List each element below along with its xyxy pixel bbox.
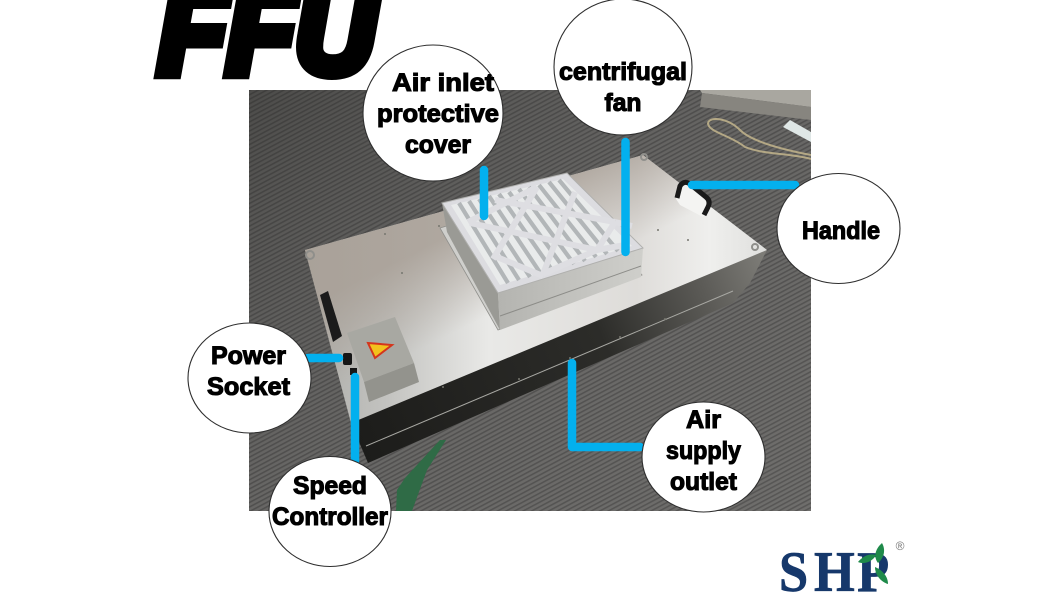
green plastic wrap <box>396 440 446 511</box>
callout: centrifugal fan <box>554 0 692 135</box>
callout: power socket: Socket <box>207 373 291 401</box>
filter lattice <box>468 187 632 276</box>
callout: speed controller: Speed <box>293 472 367 500</box>
filter frame <box>442 173 643 293</box>
panel rivets <box>384 225 689 388</box>
callout: centrifugal fan: centrifugal <box>559 58 687 86</box>
leader: power socket <box>308 354 339 362</box>
callout: air inlet protective cover: protective <box>377 100 499 128</box>
socket <box>343 353 357 375</box>
callout: air supply outlet: supply <box>666 437 741 465</box>
filter pleats <box>459 180 618 283</box>
leader: centrifugal fan <box>621 142 630 252</box>
callout: air supply outlet <box>642 402 765 512</box>
registered mark: ® <box>896 539 905 553</box>
control box <box>347 317 419 402</box>
callout: air inlet protective cover: cover <box>405 131 471 159</box>
handle: right <box>676 182 709 217</box>
callout: handle <box>777 174 900 284</box>
leader: air inlet cover <box>480 170 488 216</box>
second unit and power strip in background <box>700 90 811 159</box>
callout: air inlet protective cover: Air inlet <box>392 69 495 97</box>
callout: air supply outlet: outlet <box>670 468 738 496</box>
leader: handle <box>692 181 795 189</box>
unit top panel <box>305 155 767 423</box>
callout: speed controller <box>269 456 391 566</box>
callout: handle: Handle <box>802 217 880 245</box>
leader: speed controller <box>351 377 359 461</box>
carpet background <box>249 90 811 511</box>
callout: air inlet protective cover <box>363 45 503 181</box>
icon: green leaves <box>858 543 888 584</box>
FFU diagram page <box>153 0 904 592</box>
photo: FFU unit on carpet <box>249 90 811 511</box>
callout: centrifugal fan: fan <box>604 89 642 117</box>
filter flange <box>440 226 642 330</box>
unit side panel <box>351 250 767 463</box>
leader: air supply outlet <box>572 363 640 447</box>
callout: power socket: Power <box>211 342 286 370</box>
warning label <box>368 343 392 358</box>
handle: left <box>320 291 342 342</box>
callout: power socket <box>188 323 311 433</box>
filter housing <box>442 203 643 330</box>
callout: speed controller: Controller <box>272 503 388 531</box>
callout: air supply outlet: Air <box>686 406 721 434</box>
lifting eyes <box>306 154 758 259</box>
